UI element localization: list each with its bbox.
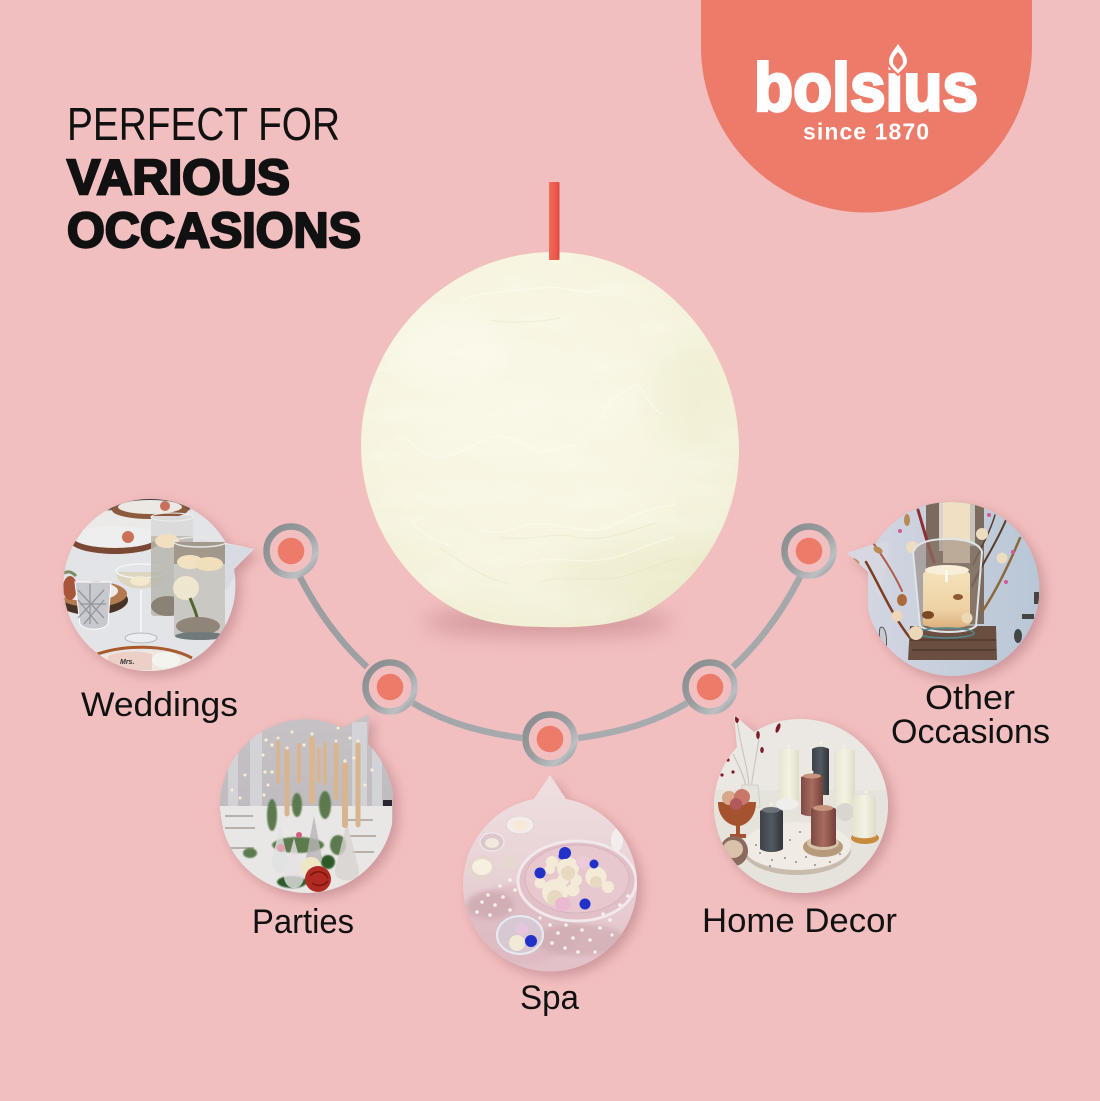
label: parties: Parties xyxy=(252,903,354,941)
wick xyxy=(549,182,560,260)
photo bubble: weddings xyxy=(50,495,260,681)
speckled tray xyxy=(743,822,851,875)
label: weddings: Weddings xyxy=(81,686,238,724)
title xyxy=(67,98,361,258)
label: other: Other xyxy=(925,679,1015,717)
node: home decor xyxy=(686,662,734,712)
candle sphere xyxy=(355,182,745,635)
baby's breath xyxy=(475,878,630,954)
crystal tumbler xyxy=(75,582,111,629)
photo bubble: spa xyxy=(460,772,640,974)
arc line xyxy=(300,577,800,738)
photo bubble: weddings: Mrs. xyxy=(120,659,134,666)
label: home decor: Home Decor xyxy=(702,902,897,940)
tall vase front xyxy=(173,537,226,640)
coupe glass xyxy=(116,563,158,644)
back candle xyxy=(943,501,970,563)
tall vase back xyxy=(151,513,193,616)
glowing candle xyxy=(923,565,970,628)
small glass holders xyxy=(469,816,543,954)
dried flowers xyxy=(733,720,759,790)
back candles xyxy=(776,747,855,821)
sphere body xyxy=(355,250,745,630)
photo bubble: home decor xyxy=(712,712,892,894)
title line 1: PERFECT FOR xyxy=(67,98,340,150)
twigs xyxy=(866,510,1020,638)
title line 3: OCCASIONS xyxy=(67,204,361,258)
label: occasions: Occasions xyxy=(891,713,1050,751)
labels xyxy=(81,679,1050,1017)
logo wordmark: bolsius xyxy=(754,50,978,126)
small dish xyxy=(720,836,748,866)
node: other occasions xyxy=(784,526,834,576)
wood back board xyxy=(926,500,984,624)
logo flame xyxy=(888,42,908,75)
connector path xyxy=(266,526,834,764)
node: parties xyxy=(366,662,414,712)
logo badge xyxy=(701,0,1032,212)
ground shadow xyxy=(423,609,673,635)
photo bubble: parties xyxy=(215,712,393,895)
node: spa xyxy=(526,714,574,764)
node: weddings xyxy=(266,526,316,576)
logo tagline: since 1870 xyxy=(803,118,929,144)
title line 2: VARIOUS xyxy=(67,151,290,205)
label: spa: Spa xyxy=(520,979,579,1017)
photo bubble: other occasions xyxy=(845,498,1043,678)
glass hurricane xyxy=(913,539,982,632)
flame centre xyxy=(893,52,903,70)
wood base xyxy=(908,626,997,660)
floating bowl xyxy=(518,841,636,921)
amber bowl xyxy=(718,789,756,838)
front candles xyxy=(760,795,879,857)
taper candles xyxy=(278,739,358,825)
